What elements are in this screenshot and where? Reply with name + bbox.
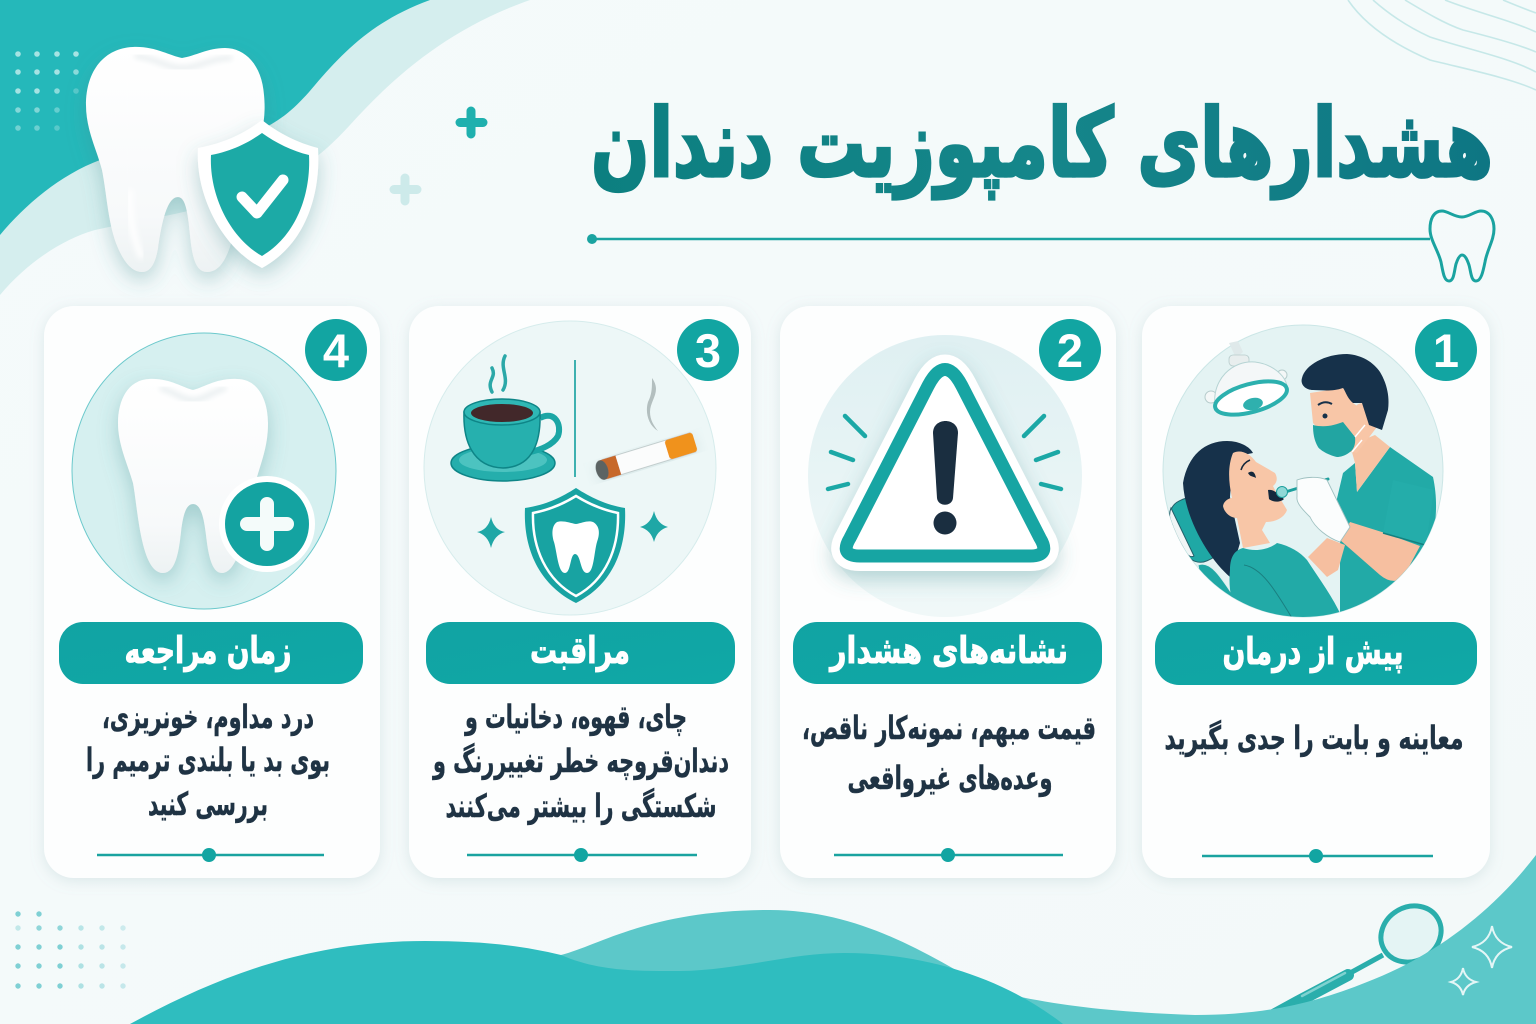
shield [198, 120, 318, 268]
body text: قیمت مبهم، نمونه‌کار ناقص، [802, 709, 1096, 747]
patient shirt [1229, 543, 1343, 620]
badge 1 [1415, 319, 1477, 381]
plus icons [394, 111, 483, 201]
body text [86, 698, 330, 823]
icon: dentist examining patient [1163, 325, 1443, 620]
dental lamp [1205, 341, 1290, 421]
title underline with tooth outline [587, 211, 1494, 281]
body text: درد مداوم، خونریزی، [102, 698, 314, 736]
body text [432, 698, 729, 825]
panel: card 2 warning signs [780, 306, 1116, 878]
pill heading: پیش از درمان [1222, 630, 1404, 673]
pill heading: مراقبت [530, 629, 630, 672]
body text: وعده‌های غیرواقعی [848, 759, 1052, 797]
divider [834, 848, 1063, 862]
icon: coffee, cigarette, shield [424, 321, 716, 615]
badge 2 [1039, 319, 1101, 381]
patient arm [1308, 538, 1345, 577]
pill heading [1155, 622, 1477, 685]
hero icon: tooth with shield [86, 47, 318, 272]
patient hair [1183, 441, 1253, 577]
icon: dental mirror [1268, 895, 1451, 1018]
patient face [1223, 451, 1287, 548]
doctor arm [1340, 522, 1420, 581]
badge 3 [677, 319, 739, 381]
panel: card 4 return time [44, 306, 380, 878]
icon: tooth with plus [72, 333, 336, 609]
divider [97, 848, 324, 862]
bottom waves [130, 855, 1536, 1024]
panel: card 1 before treatment [1142, 306, 1490, 878]
top-right contour lines [1348, 0, 1536, 90]
body text: بوی بد یا بلندی ترمیم را [86, 741, 330, 779]
badge 3: 3 [695, 324, 721, 377]
bottom-left dot grid [15, 911, 126, 989]
patient chair [1169, 498, 1234, 598]
sparkles [477, 511, 668, 548]
dental mirror tool [1282, 479, 1328, 493]
pill heading [426, 622, 735, 684]
shield with tooth [525, 488, 625, 603]
body text: دندان‌قروچه خطر تغییررنگ و [432, 742, 729, 780]
body text [802, 709, 1096, 797]
cigarette [593, 378, 698, 481]
divider [467, 848, 697, 862]
body text: بررسی کنید [148, 785, 268, 823]
badge 4 [305, 319, 367, 381]
top-left dot grid [15, 51, 79, 131]
doctor head [1310, 388, 1380, 453]
badge 4: 4 [323, 324, 349, 377]
icon: warning triangle [808, 335, 1082, 617]
pill heading: زمان مراجعه [124, 629, 292, 672]
pill heading: نشانه‌های هشدار [828, 629, 1068, 672]
pill heading [793, 622, 1102, 684]
divider [1202, 849, 1433, 863]
body text: چای، قهوه، دخانیات و [464, 698, 687, 736]
sparkles on wave [1451, 926, 1512, 995]
glove [1297, 477, 1350, 542]
panel: card 3 care [409, 306, 751, 878]
badge 2: 2 [1057, 324, 1083, 377]
doctor scrubs [1335, 447, 1436, 613]
top-left wave decoration [0, 0, 1536, 295]
body text: شکستگی را بیشتر می‌کنند [446, 787, 716, 825]
pill heading [59, 622, 363, 684]
coffee cup [451, 356, 559, 481]
badge 1: 1 [1433, 324, 1459, 377]
